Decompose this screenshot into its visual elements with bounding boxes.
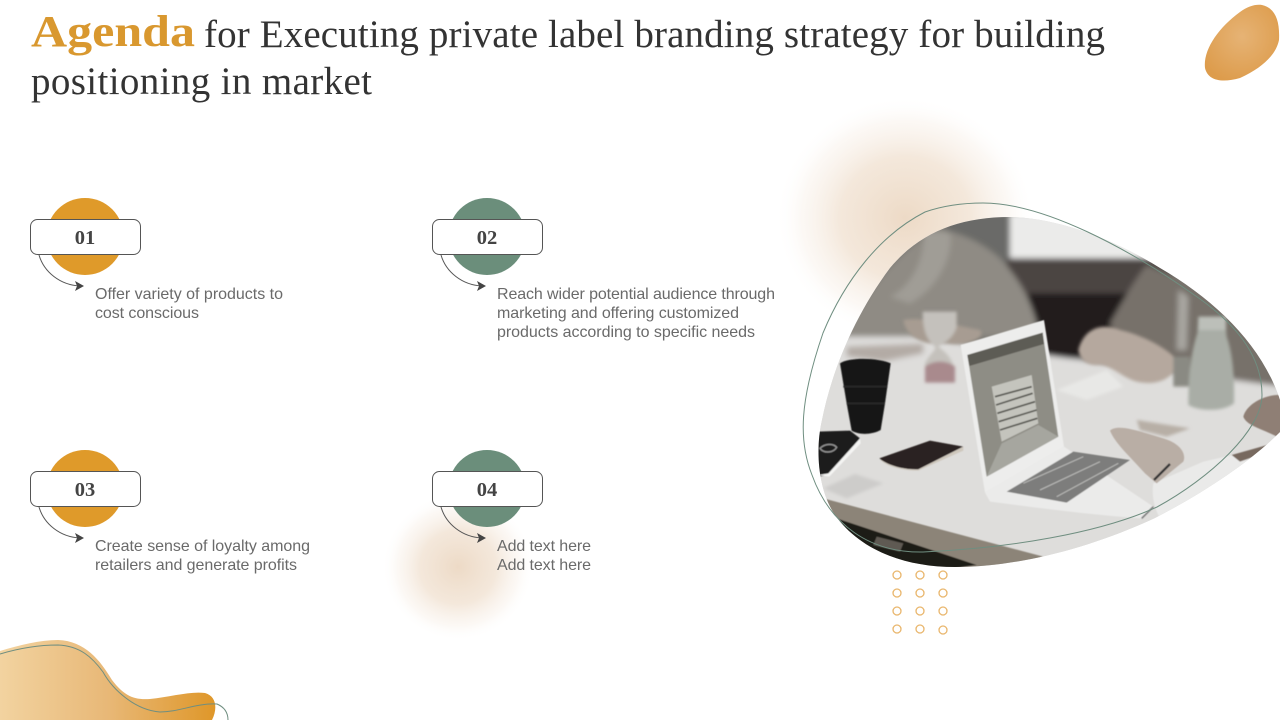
agenda item 04 [432, 450, 591, 574]
text 01: Offer variety of products to [95, 286, 283, 303]
thin outline around photo [803, 203, 1262, 552]
number box 04 [432, 472, 542, 506]
decorative wave bottom left [0, 640, 228, 720]
text 02: marketing and offering customized [497, 305, 739, 322]
table edge and under-table [823, 498, 1043, 573]
cup [840, 359, 891, 434]
photo: team at a table with a laptop [818, 217, 1280, 567]
agenda item 01 [30, 198, 283, 322]
circle 02 [448, 198, 526, 275]
number box 02: 02 [477, 227, 497, 249]
text 01: cost conscious [95, 305, 199, 322]
text 03: Create sense of loyalty among [95, 538, 310, 555]
text 02: products according to specific needs [497, 324, 755, 341]
arrow 03 [39, 507, 84, 543]
laptop [961, 320, 1064, 493]
number box 01: 01 [75, 227, 95, 249]
title: Agenda [31, 7, 195, 56]
circle 04 [448, 450, 526, 527]
text 02 [497, 286, 775, 341]
number box 03 [30, 472, 140, 506]
text 04: Add text here [497, 538, 591, 555]
text 04: Add text here [497, 557, 591, 574]
hourglass [921, 310, 958, 366]
arrow 02 [441, 255, 486, 291]
title [31, 7, 1105, 103]
agenda item 02 [432, 198, 775, 341]
arrow 01 [39, 255, 84, 291]
dot grid [893, 571, 947, 634]
decorative egg shape top right [1205, 5, 1279, 81]
number box 01 [30, 220, 140, 254]
title: positioning in market [31, 60, 372, 103]
decorative peach glow behind photo [775, 96, 1035, 340]
number box 02 [432, 220, 542, 254]
circle 01 [46, 198, 124, 275]
arrow 04 [441, 507, 486, 543]
text 03 [95, 538, 310, 574]
text 04 [497, 538, 591, 574]
text 01 [95, 286, 283, 322]
card on table [823, 474, 883, 498]
text 02: Reach wider potential audience through [497, 286, 775, 303]
circle 03 [46, 450, 124, 527]
decorative peach glow lower centre [382, 493, 534, 641]
number box 04: 04 [477, 479, 497, 501]
notebook [817, 431, 860, 477]
number box 03: 03 [75, 479, 95, 501]
agenda item 03 [30, 450, 310, 574]
text 03: retailers and generate profits [95, 557, 297, 574]
bottle [1188, 318, 1234, 410]
sleeve and hand [1153, 443, 1280, 518]
phone [879, 441, 963, 469]
title: for Executing private label branding strategy for building [204, 13, 1105, 56]
